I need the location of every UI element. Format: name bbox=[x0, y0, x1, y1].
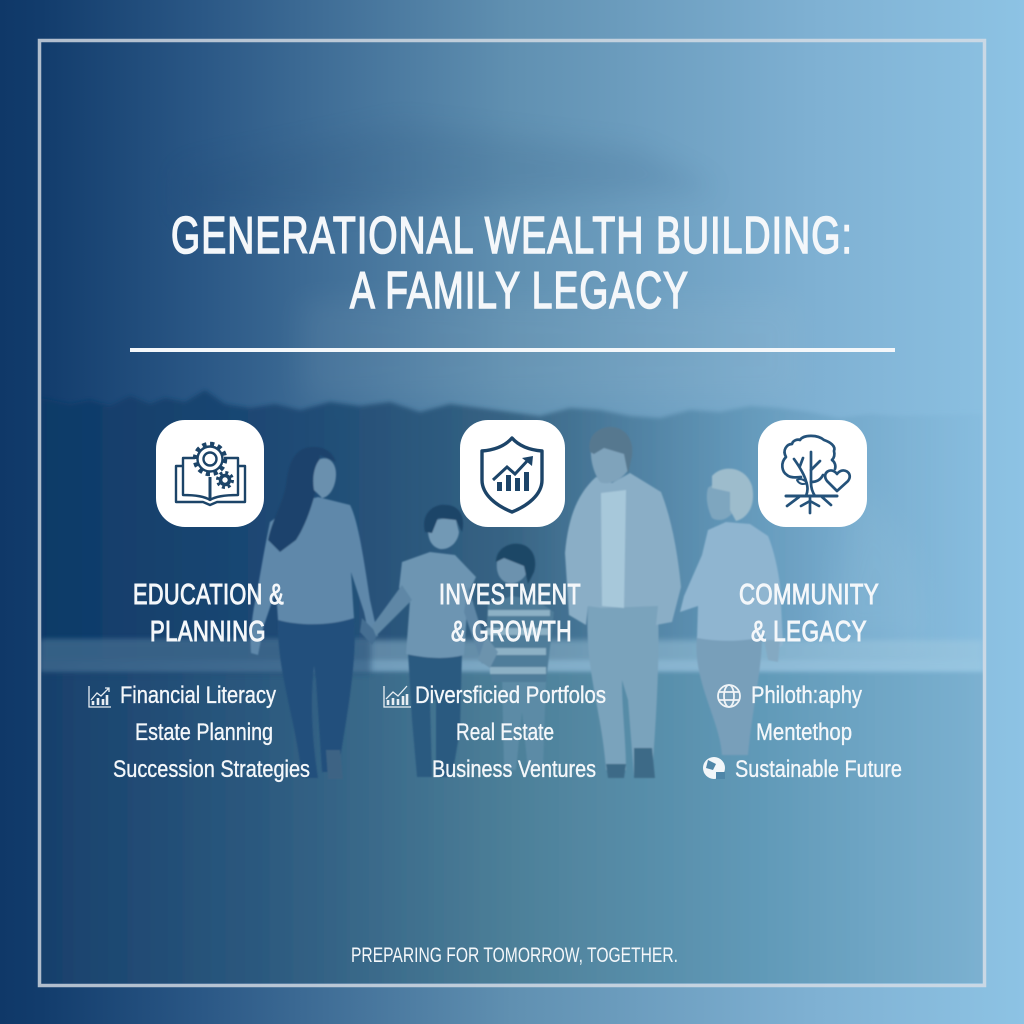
list: Succession Strategies bbox=[113, 756, 310, 783]
icon: filled globe bbox=[703, 757, 725, 779]
list bbox=[735, 682, 902, 783]
icon: shield with rising chart bbox=[460, 420, 565, 527]
panel: education and planning bbox=[89, 420, 310, 783]
list: Financial Literacy bbox=[120, 682, 276, 709]
title divider bbox=[130, 348, 895, 352]
icon: globe bbox=[718, 685, 740, 707]
person: father bbox=[565, 427, 681, 778]
heading bbox=[739, 579, 879, 648]
family photo: five people walking bbox=[251, 427, 783, 779]
title bbox=[171, 207, 853, 320]
background photo: park landscape bbox=[35, 125, 995, 992]
list: Mentethop bbox=[756, 719, 852, 746]
list: Sustainable Future bbox=[735, 756, 902, 783]
heading: COMMUNITY bbox=[739, 579, 879, 611]
heading bbox=[439, 579, 581, 648]
list: Business Ventures bbox=[432, 756, 596, 783]
heading: PLANNING bbox=[150, 616, 266, 648]
heading: & GROWTH bbox=[451, 616, 572, 648]
list: Estate Planning bbox=[135, 719, 273, 746]
list: Diversficied Portfolos bbox=[415, 682, 606, 709]
heading: EDUCATION & bbox=[133, 579, 284, 611]
list: Real Estate bbox=[456, 719, 554, 746]
person: younger boy bbox=[478, 544, 554, 770]
list bbox=[113, 682, 310, 783]
list bbox=[415, 682, 606, 783]
person: grandmother bbox=[680, 469, 783, 755]
heading: INVESTMENT bbox=[439, 579, 581, 611]
footer tagline: PREPARING FOR TOMORROW, TOGETHER. bbox=[351, 944, 678, 967]
icon: book with gears bbox=[156, 420, 264, 527]
person: older boy bbox=[372, 505, 488, 777]
icon: tree with heart and roots bbox=[758, 420, 867, 527]
person: mother bbox=[251, 447, 378, 779]
heading: & LEGACY bbox=[751, 616, 867, 648]
list: Philoth:aphy bbox=[751, 682, 862, 709]
icon: small chart bbox=[89, 686, 111, 707]
heading bbox=[133, 579, 284, 648]
title: A FAMILY LEGACY bbox=[350, 262, 689, 320]
panel: community and legacy bbox=[703, 420, 902, 783]
panel: investment and growth bbox=[384, 420, 606, 783]
icon: small chart bbox=[384, 686, 411, 707]
